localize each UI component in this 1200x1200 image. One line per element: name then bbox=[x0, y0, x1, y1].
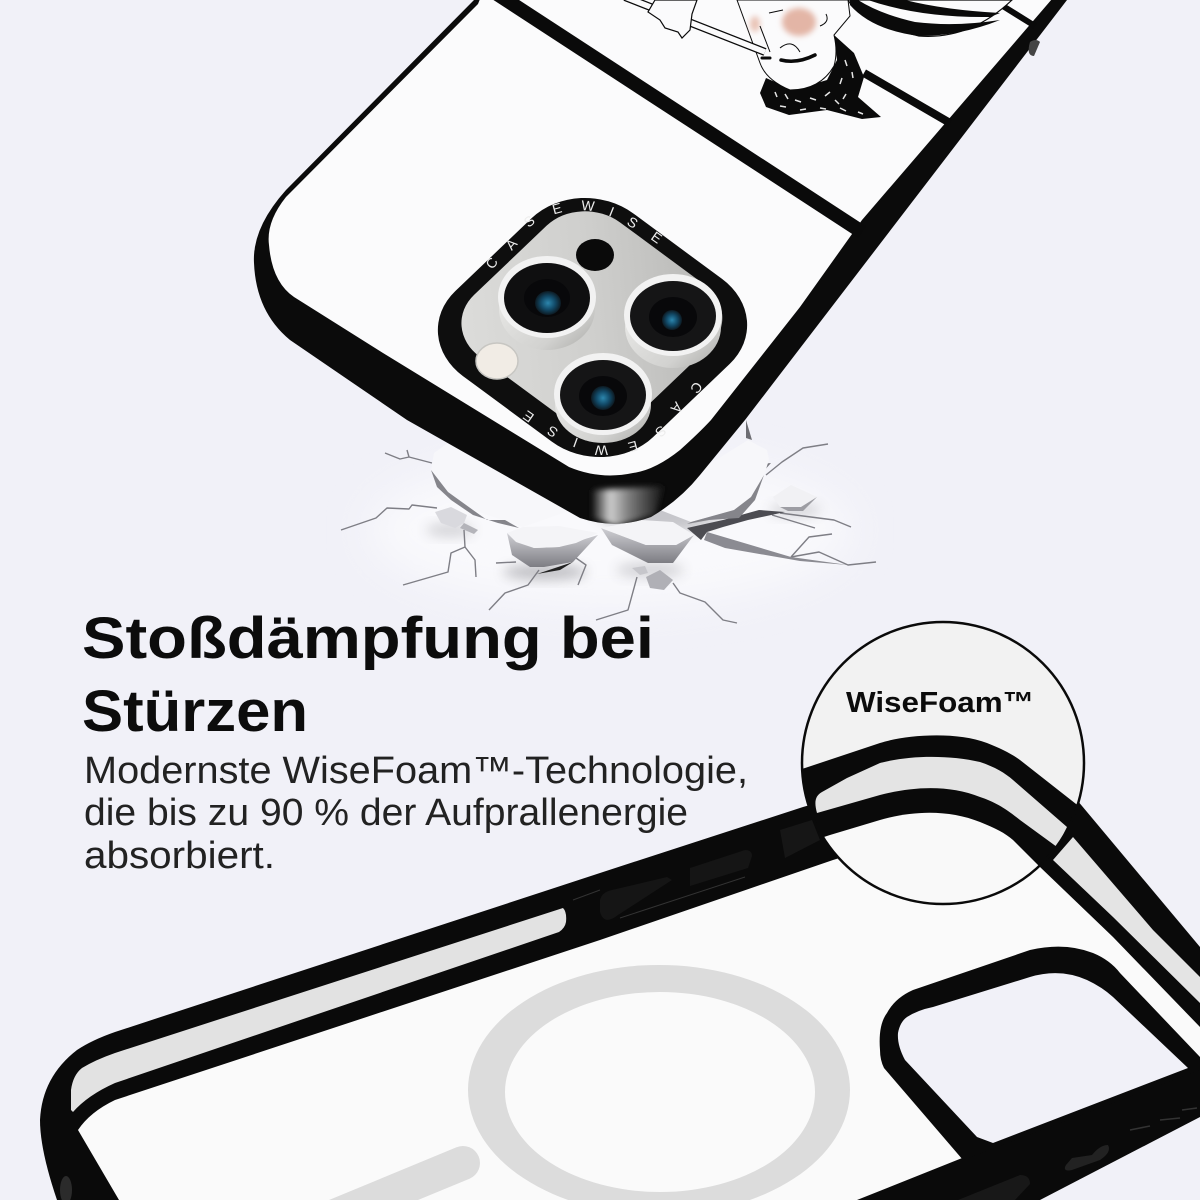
phone: top case bbox=[254, 0, 1067, 526]
hand bbox=[648, 0, 697, 38]
hair speckles bbox=[775, 60, 863, 114]
body text: Modernste WiseFoam™-Technologie, bbox=[84, 750, 748, 792]
face bbox=[737, 0, 850, 90]
highlight on corner bbox=[592, 486, 664, 526]
facial features bbox=[781, 55, 815, 61]
flash bbox=[476, 343, 518, 379]
crack chunk: round right bbox=[773, 485, 817, 511]
body text: absorbiert. bbox=[84, 835, 275, 877]
phone: clear case interior bbox=[40, 750, 1200, 1200]
crack chunk: centre right bbox=[601, 520, 694, 563]
ground cracks bbox=[341, 420, 876, 623]
magnet ring bbox=[468, 965, 850, 1200]
frame bbox=[40, 750, 1200, 1200]
long diagonal line bbox=[494, 0, 862, 232]
magnet tail bbox=[330, 1163, 463, 1200]
lens 3 bbox=[554, 353, 652, 443]
foam strip left bbox=[71, 908, 566, 1112]
side buttons bbox=[573, 820, 820, 920]
crack chunk: centre left bbox=[507, 526, 598, 574]
case white back bbox=[269, 0, 1052, 475]
camera cutout bbox=[880, 947, 1200, 1160]
cheeks bbox=[750, 8, 816, 36]
striped shape bbox=[848, 0, 1012, 36]
heading: Stürzen bbox=[82, 679, 308, 744]
brand ring bottom: CASEWISE bbox=[520, 379, 706, 459]
body text bbox=[84, 750, 748, 877]
heading bbox=[82, 606, 654, 744]
lens 2 bbox=[624, 274, 722, 368]
mic hole bbox=[576, 239, 614, 271]
heading: Stoßdämpfung bei bbox=[82, 606, 654, 671]
crack chunk: left bbox=[431, 420, 600, 528]
label: WiseFoam™ bbox=[846, 687, 1034, 719]
magnified frame bbox=[803, 735, 1076, 866]
clear back bbox=[78, 830, 1200, 1200]
crack chunk: bottom bbox=[632, 566, 673, 590]
port details bbox=[60, 1108, 1197, 1200]
crack dark gap bbox=[687, 510, 785, 540]
brand ring top: CASEWISE bbox=[482, 197, 665, 272]
hair bbox=[760, 35, 881, 119]
artwork bbox=[494, 0, 1035, 232]
lens 1 bbox=[498, 256, 596, 350]
callout: WiseFoam magnifier bbox=[800, 620, 1086, 906]
short line bbox=[864, 73, 950, 123]
side buttons bbox=[1029, 40, 1040, 56]
foam strip right bbox=[1053, 837, 1200, 1003]
body text: die bis zu 90 % der Aufprallenergie bbox=[84, 792, 688, 834]
crack chunk: right bbox=[660, 440, 769, 524]
crack wedge bbox=[704, 532, 848, 565]
top right line bbox=[998, 3, 1035, 26]
camera island bbox=[408, 173, 777, 482]
case black frame bbox=[254, 0, 1067, 524]
crack chunk: small left bbox=[435, 507, 478, 534]
stick bbox=[625, 0, 765, 52]
